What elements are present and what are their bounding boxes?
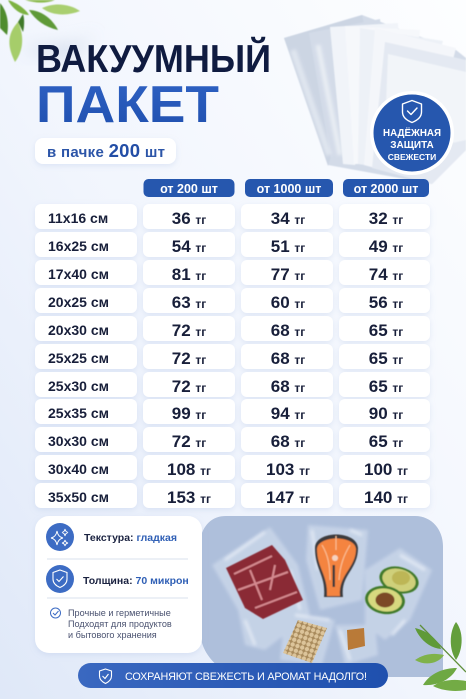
price table: 65 тг: [369, 321, 403, 340]
price table: 25x25 см: [48, 350, 109, 366]
table header: quantity tiers: от 1000 шт: [257, 182, 321, 196]
table header: quantity tiers: от 200 шт: [160, 182, 218, 196]
price table: 68 тг: [271, 321, 305, 340]
price table: 99 тг: [172, 404, 206, 423]
text: benefits: Подходят для продуктов: [68, 619, 172, 629]
chickpeas: [283, 620, 327, 663]
price table: 51 тг: [271, 237, 305, 256]
icon: shield: [46, 565, 74, 593]
price table: 54 тг: [172, 237, 206, 256]
text: thickness: Толщина: 70 микрон: [83, 575, 189, 587]
banner: keep fresh: СОХРАНЯЮТ СВЕЖЕСТЬ И АРОМАТ НАДОЛГО!: [125, 671, 367, 683]
badge: reliable freshness protection: [370, 91, 454, 175]
banner: keep fresh: [78, 663, 388, 688]
icon: leaves bottom right: [415, 622, 466, 691]
bag wrinkles: [225, 530, 425, 660]
price table: 34 тг: [271, 209, 305, 228]
title: ПАКЕТ: ПАКЕТ: [36, 76, 219, 134]
icon: shield: [402, 100, 422, 122]
price table: 74 тг: [369, 265, 403, 284]
text: benefits: Прочные и герметичные: [68, 608, 171, 618]
price table: 68 тг: [271, 349, 305, 368]
pill: pack quantity: в пачке 200 шт: [47, 140, 165, 161]
price table: 68 тг: [271, 432, 305, 451]
price table: 65 тг: [369, 377, 403, 396]
icon: check: [50, 608, 60, 618]
price table: 140 тг: [364, 488, 408, 507]
price table: 60 тг: [271, 293, 305, 312]
text: benefits: [68, 608, 172, 640]
price table: 36 тг: [172, 209, 206, 228]
price table: 77 тг: [271, 265, 305, 284]
price table: 30x30 см: [48, 433, 109, 449]
table header: quantity tiers: [144, 179, 429, 197]
price table: 25x35 см: [48, 405, 109, 421]
price table: 108 тг: [167, 460, 211, 479]
price table: 30x40 см: [48, 461, 109, 477]
photo: vacuum-packed food: [200, 516, 443, 677]
pill: pack quantity: [35, 138, 176, 164]
price table: 56 тг: [369, 293, 403, 312]
price table: 25x30 см: [48, 378, 109, 394]
price table: 72 тг: [172, 349, 206, 368]
price table: 35x50 см: [48, 489, 109, 505]
table header: quantity tiers: от 2000 шт: [354, 182, 418, 196]
icon: shield: [100, 669, 112, 684]
price table: 100 тг: [364, 460, 408, 479]
image: stack of vacuum bags: [284, 15, 466, 184]
icon: leaves top left: [0, 0, 100, 62]
price table: 81 тг: [172, 265, 206, 284]
badge: reliable freshness protection: ЗАЩИТА: [390, 140, 434, 151]
price table: 49 тг: [369, 237, 403, 256]
badge: reliable freshness protection: НАДЁЖНАЯ: [383, 126, 441, 139]
price table: 65 тг: [369, 432, 403, 451]
price table: [35, 204, 430, 508]
price table: 147 тг: [266, 488, 310, 507]
price table: 103 тг: [266, 460, 310, 479]
text: benefits: и бытового хранения: [68, 630, 157, 640]
price table: 68 тг: [271, 377, 305, 396]
price table: 72 тг: [172, 377, 206, 396]
badge: reliable freshness protection: СВЕЖЕСТИ: [388, 152, 436, 162]
price table: 17x40 см: [48, 266, 109, 282]
salmon: [315, 534, 358, 597]
price table: 16x25 см: [48, 238, 109, 254]
price table: 94 тг: [271, 404, 305, 423]
icon: sparkles: [46, 523, 74, 551]
price table: 63 тг: [172, 293, 206, 312]
price table: 20x30 см: [48, 322, 109, 338]
price table: 11x16 см: [48, 210, 108, 226]
text: texture: Текстура: гладкая: [84, 532, 177, 544]
meat: [226, 545, 303, 619]
bags around food: [212, 525, 432, 665]
price table: 90 тг: [369, 404, 403, 423]
avocado halves: [363, 562, 422, 617]
title: ВАКУУМНЫЙ: ВАКУУМНЫЙ: [36, 36, 271, 81]
price table: 65 тг: [369, 349, 403, 368]
panel: bag features: [35, 516, 202, 653]
nuts: [347, 628, 365, 650]
price table: 72 тг: [172, 432, 206, 451]
price table: 32 тг: [369, 209, 403, 228]
price table: 72 тг: [172, 321, 206, 340]
price table: 153 тг: [167, 488, 211, 507]
price table: 20x25 см: [48, 294, 109, 310]
